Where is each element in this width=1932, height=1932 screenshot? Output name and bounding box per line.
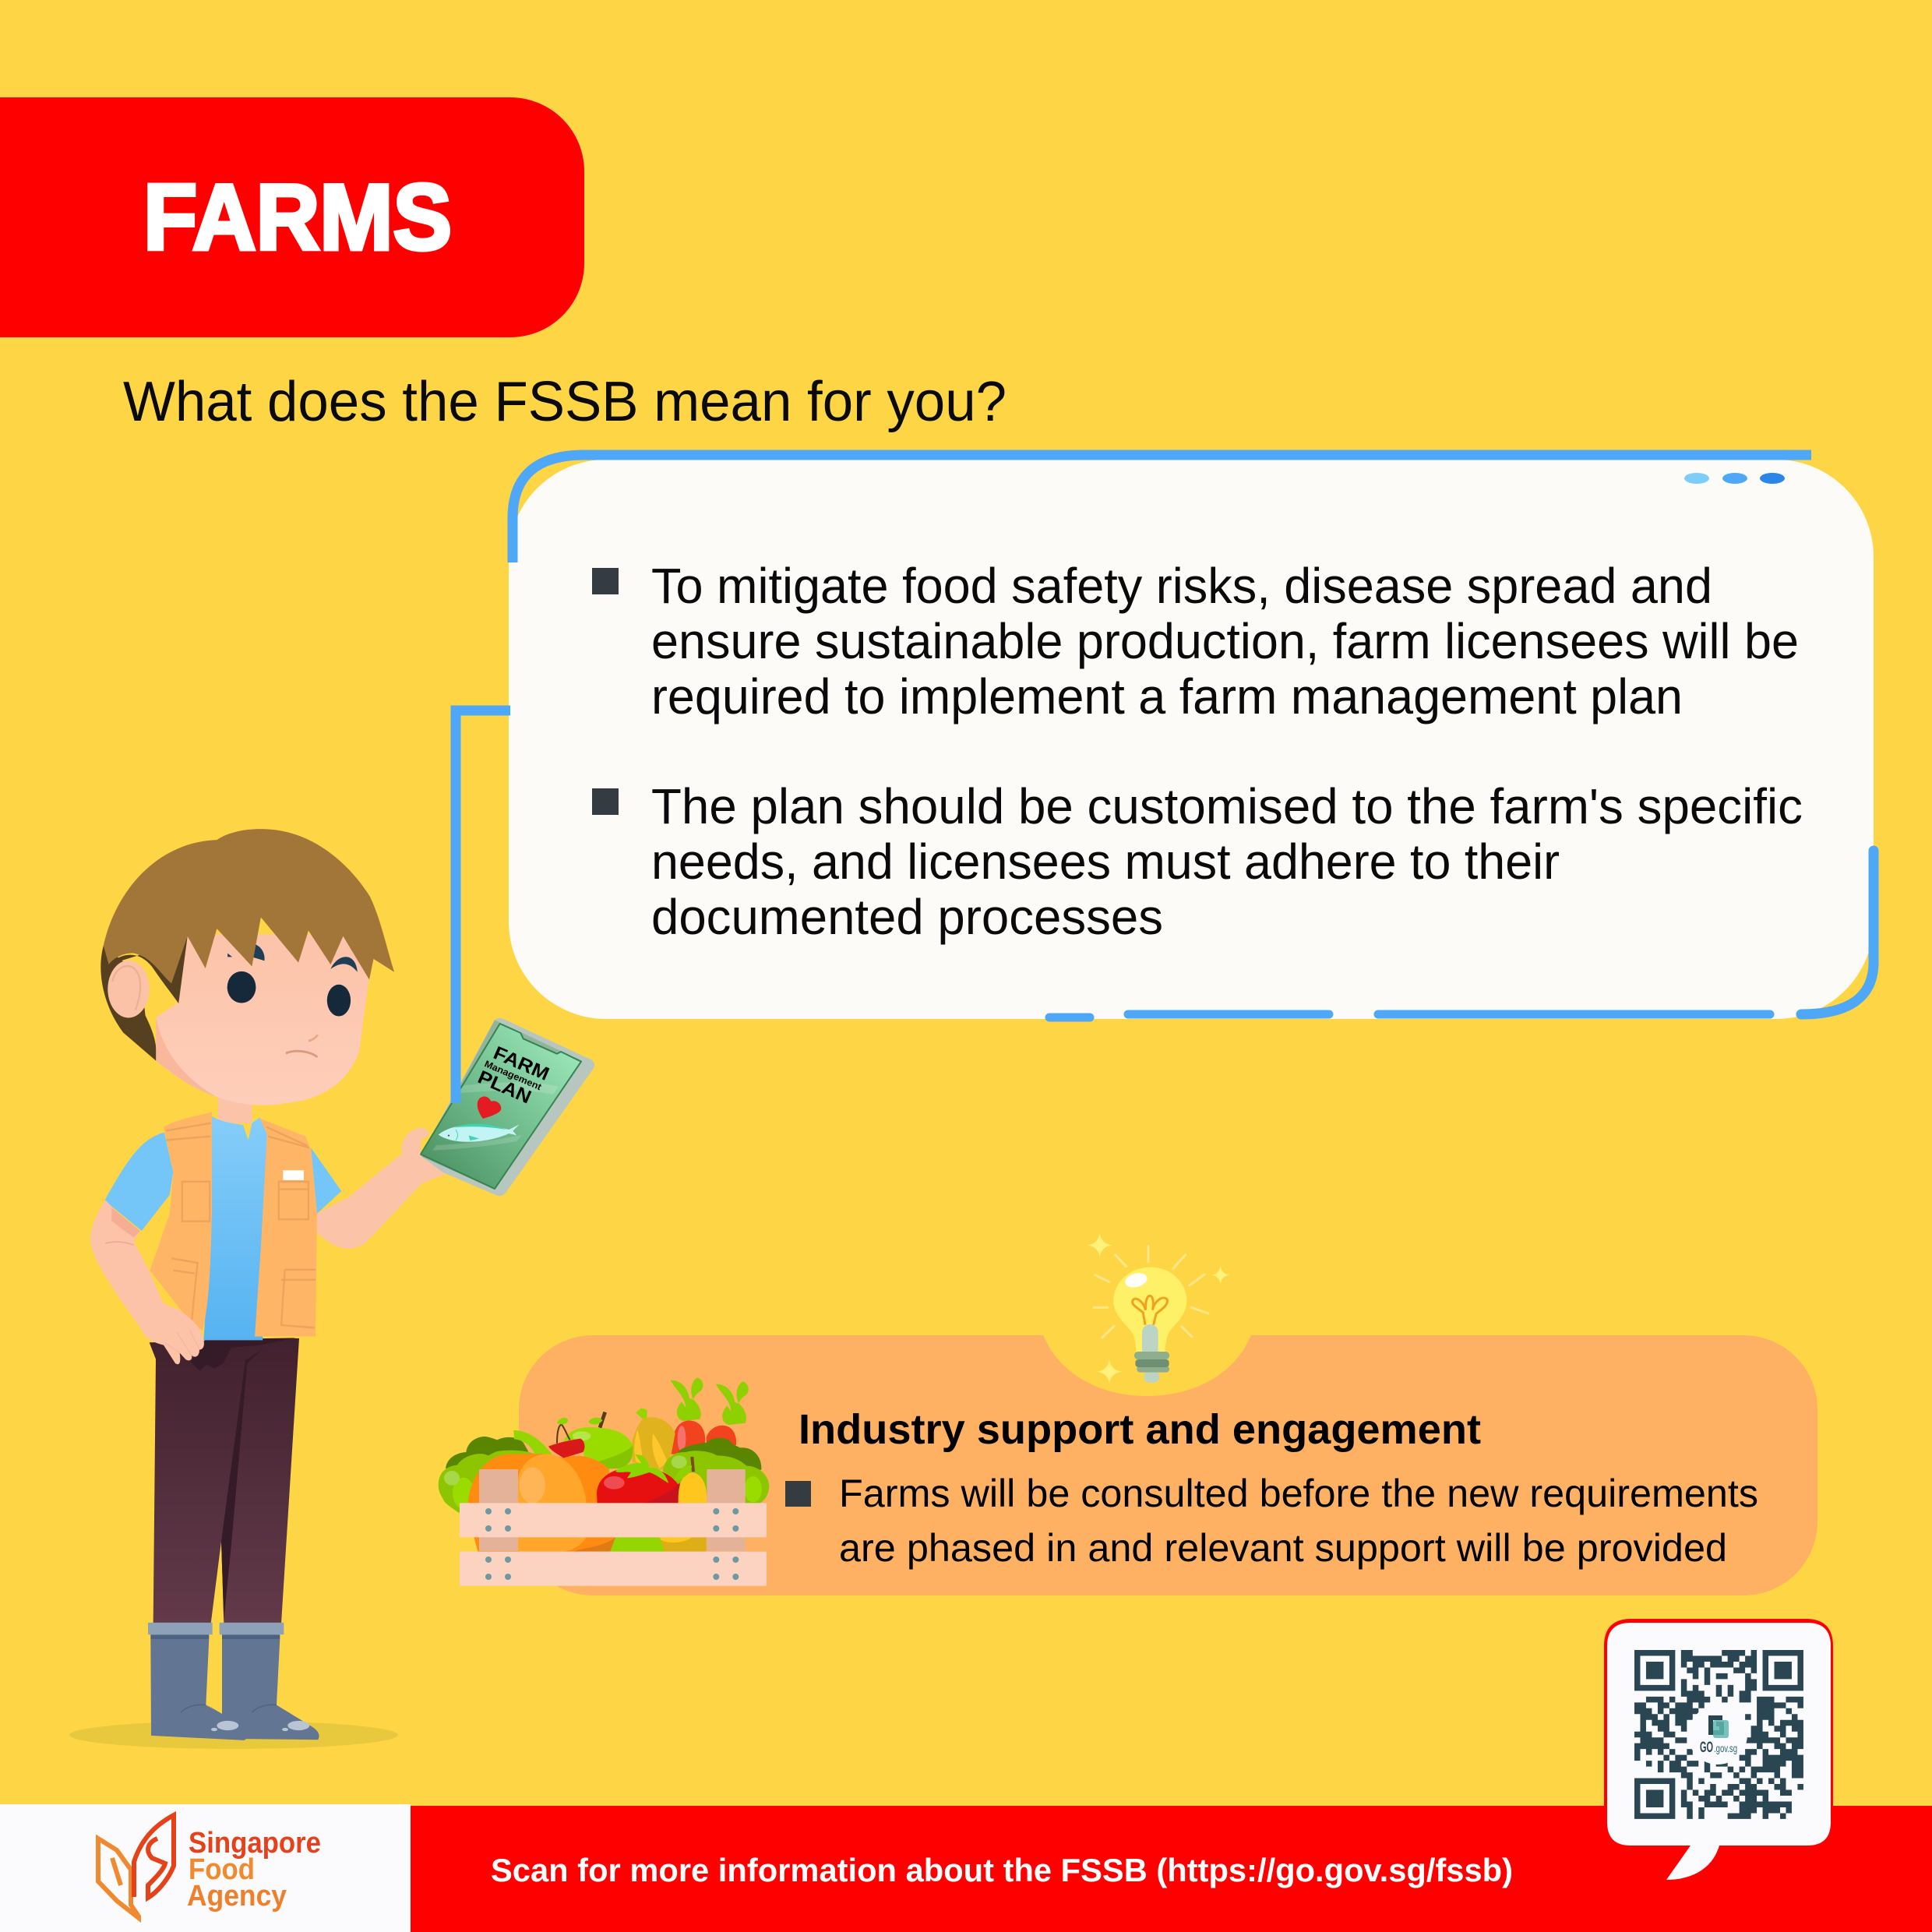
logo: Singapore Food Agency: Singapore — [189, 1827, 321, 1860]
panel: farm management plan requirements: needs, and licensees must adhere to their — [651, 834, 1560, 890]
logo: Singapore Food Agency: Agency — [187, 1880, 287, 1913]
icon: light bulb — [1088, 1232, 1229, 1384]
panel: industry support and engagement: Farms will be consulted before the new requirements — [839, 1472, 1758, 1515]
tomato — [597, 1454, 681, 1503]
cherry — [548, 1418, 585, 1458]
header banner: FARMS: FARMS — [143, 165, 452, 270]
logo: Singapore Food Agency — [98, 1815, 321, 1918]
upper body and head — [100, 829, 394, 1340]
panel: farm management plan requirements — [509, 455, 1874, 1019]
carrots — [671, 1377, 749, 1454]
left lettuce — [439, 1430, 552, 1513]
footer bar: Scan for more information about the FSSB (https://go.gov.sg/fssb) — [491, 1852, 1513, 1888]
pumpkin — [468, 1454, 617, 1552]
panel: industry support and engagement — [519, 1334, 1817, 1595]
crate planks — [460, 1469, 767, 1586]
legs and boots — [148, 1338, 319, 1740]
panel: farm management plan requirements: To mitigate food safety risks, disease spread and — [651, 558, 1712, 614]
hand shadow on trousers — [191, 1338, 296, 1371]
right lettuce — [663, 1438, 769, 1504]
icon: farmer hand over tablet — [317, 1127, 445, 1249]
subtitle question: What does the FSSB mean for you? — [123, 371, 1007, 433]
yellow pepper — [674, 1457, 707, 1503]
footer bar — [0, 1804, 1932, 1932]
panel: industry support and engagement: are phased in and relevant support will be provided — [839, 1526, 1727, 1570]
banana — [631, 1408, 675, 1470]
QR centre GO.gov.sg logo: .gov.sg — [1714, 1742, 1737, 1754]
panel: farm management plan requirements: ensure sustainable production, farm licensees will be — [651, 613, 1799, 669]
icon: tablet with farm management plan: PLAN — [474, 1066, 534, 1108]
produce below plank — [610, 1537, 707, 1552]
logo: Singapore Food Agency: Food — [189, 1853, 255, 1886]
icon: tablet with farm management plan: Management — [483, 1058, 543, 1092]
icon: tablet with farm management plan — [420, 1018, 594, 1196]
apple — [563, 1412, 633, 1470]
panel: farm management plan requirements: The plan should be customised to the farm's specific — [651, 778, 1803, 834]
ground shadow — [69, 1721, 398, 1749]
icon: tablet with farm management plan: FARM — [490, 1042, 552, 1085]
panel: farm management plan requirements: required to implement a farm management plan — [651, 668, 1683, 724]
QR centre GO.gov.sg logo — [1688, 1705, 1747, 1765]
header banner: FARMS — [0, 97, 584, 337]
QR code speech bubble — [1604, 1619, 1833, 1880]
left arm and hand on hip — [90, 1200, 204, 1364]
icon: farmer character holding tablet — [69, 829, 398, 1749]
QR centre GO.gov.sg logo: GO — [1700, 1740, 1713, 1756]
QR code pattern — [1634, 1653, 1803, 1816]
panel: farm management plan requirements: documented processes — [651, 889, 1163, 945]
icon: crate of fruit and vegetables — [439, 1377, 769, 1586]
connector line from panel to tablet — [456, 710, 510, 1103]
panel: industry support and engagement: Industry support and engagement — [799, 1406, 1481, 1453]
